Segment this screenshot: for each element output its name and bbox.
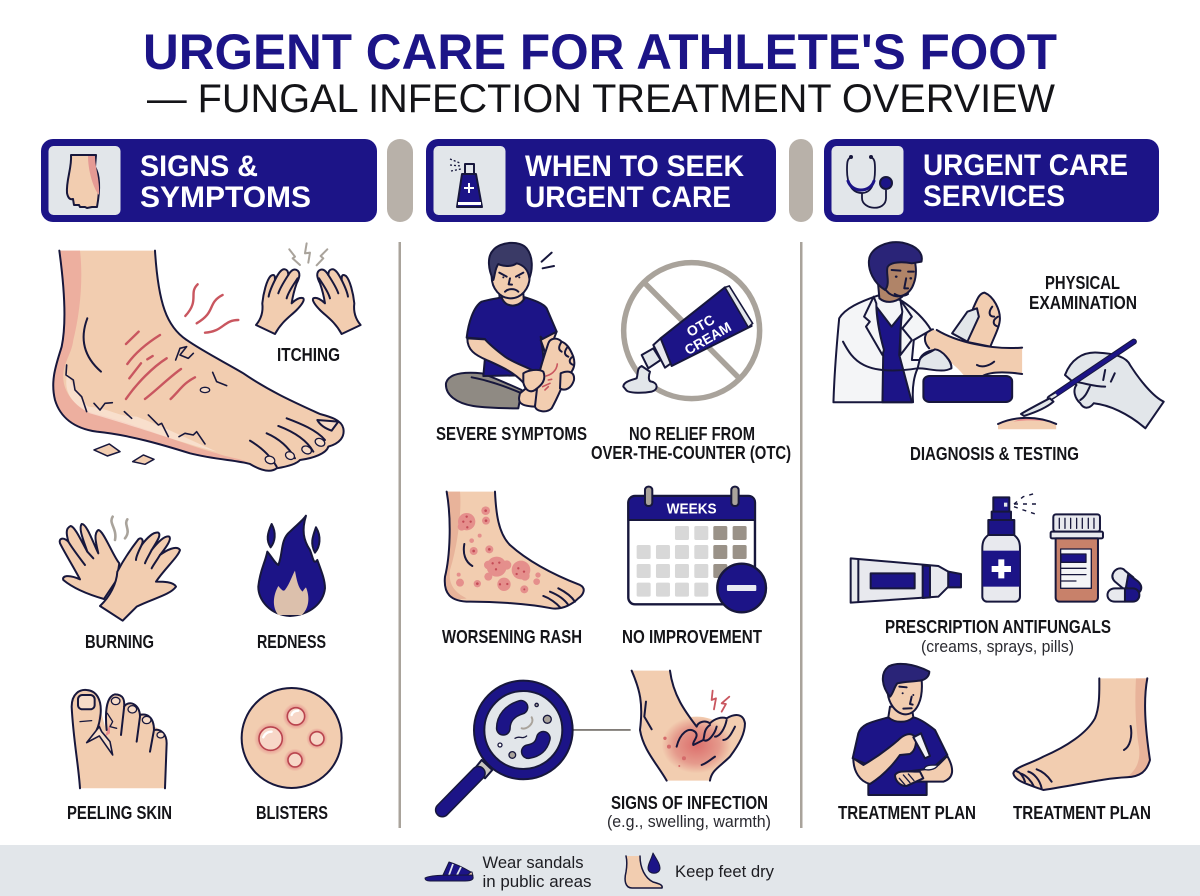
header: when to seek urgent care: WHEN TO SEEK (525, 150, 744, 183)
label: signs of infection: (e.g., swelling, warmth) (607, 812, 771, 831)
illustration: doctor examining foot (833, 242, 1022, 402)
header: urgent care services (824, 139, 1159, 222)
label: no relief from OTC: OVER-THE-COUNTER (OTC) (591, 443, 791, 463)
icon: peeling toes (72, 690, 167, 788)
icon: cream tube (851, 558, 961, 603)
illustration: foot with worsening rash (445, 492, 584, 609)
label: no improvement: NO IMPROVEMENT (622, 627, 762, 647)
icon: spray bottle (982, 493, 1037, 602)
header: when to seek urgent care: URGENT CARE (525, 181, 731, 214)
icon: magnifier with bacteria (442, 681, 631, 810)
text: wear sandals (482, 854, 592, 891)
label: physical examination (1029, 273, 1137, 313)
title (143, 24, 1057, 121)
label: prescription antifungals: (creams, sprays, pills) (921, 637, 1074, 656)
icon: no OTC cream: OTC (684, 311, 717, 340)
icon: no OTC cream (623, 263, 760, 399)
label: treatment plan (foot): TREATMENT PLAN (1013, 803, 1151, 823)
icon: pill bottle and capsules (1051, 514, 1141, 602)
label: no relief from OTC (591, 424, 791, 463)
text: keep feet dry: Keep feet dry (675, 863, 775, 881)
icon: foot with water drop (625, 853, 662, 888)
illustration: healthy foot (1013, 678, 1150, 790)
label: diagnosis and testing: DIAGNOSIS & TESTING (910, 444, 1079, 464)
header: signs and symptoms (41, 139, 377, 222)
header: signs and symptoms: SIGNS & (140, 150, 258, 183)
label: signs of infection: SIGNS OF INFECTION (611, 793, 768, 813)
icon: flame for redness (258, 516, 325, 616)
footer: prevention tips (0, 845, 1200, 896)
panel: signs and symptoms (41, 139, 377, 823)
label: physical examination: EXAMINATION (1029, 293, 1137, 313)
icon: sandal (425, 862, 473, 881)
label: no relief from OTC: NO RELIEF FROM (629, 424, 755, 444)
icon: foot top view (67, 155, 99, 208)
illustration: person with severe symptoms (446, 243, 574, 411)
header: when to seek urgent care (426, 139, 776, 222)
title: — FUNGAL INFECTION TREATMENT OVERVIEW (147, 77, 1055, 121)
label: blisters: BLISTERS (256, 803, 328, 823)
title: URGENT CARE FOR ATHLETE'S FOOT (143, 24, 1057, 80)
label: burning: BURNING (85, 632, 154, 652)
label: prescription antifungals (885, 617, 1111, 656)
label: worsening rash: WORSENING RASH (442, 627, 582, 647)
panel: urgent care services (824, 139, 1164, 823)
label: severe symptoms: SEVERE SYMPTOMS (436, 424, 587, 444)
illustration: gloved hand with swab (998, 342, 1164, 429)
icon: spray tube (450, 159, 482, 207)
header: signs and symptoms: SYMPTOMS (140, 181, 311, 214)
illustration: person applying cream (853, 664, 952, 795)
label: peeling skin: PEELING SKIN (67, 803, 172, 823)
illustration: main foot with cracked skin (53, 251, 344, 471)
icon: stethoscope (847, 155, 892, 208)
label: itching: ITCHING (277, 345, 340, 365)
icon: blisters (242, 688, 342, 788)
illustration: prescription antifungals (851, 493, 1141, 603)
label: physical examination: PHYSICAL (1045, 273, 1120, 293)
text: wear sandals: Wear sandals (482, 854, 584, 872)
icon: no OTC cream: CREAM (682, 318, 734, 358)
label: treatment plan (person): TREATMENT PLAN (838, 803, 976, 823)
header: urgent care services: URGENT CARE (923, 149, 1128, 182)
label: redness: REDNESS (257, 632, 326, 652)
label: signs of infection (607, 793, 771, 831)
label: prescription antifungals: PRESCRIPTION ANTIFUNGALS (885, 617, 1111, 637)
icon: itching hands (256, 243, 361, 334)
icon: weeks calendar with minus badge: WEEKS (667, 501, 717, 517)
illustration: infected foot (632, 671, 745, 781)
icon: weeks calendar with minus badge (628, 487, 766, 612)
header: urgent care services: SERVICES (923, 180, 1065, 213)
text: wear sandals: in public areas (482, 873, 592, 891)
panel: when to seek urgent care (426, 139, 791, 831)
icon: burning hands (60, 517, 180, 621)
